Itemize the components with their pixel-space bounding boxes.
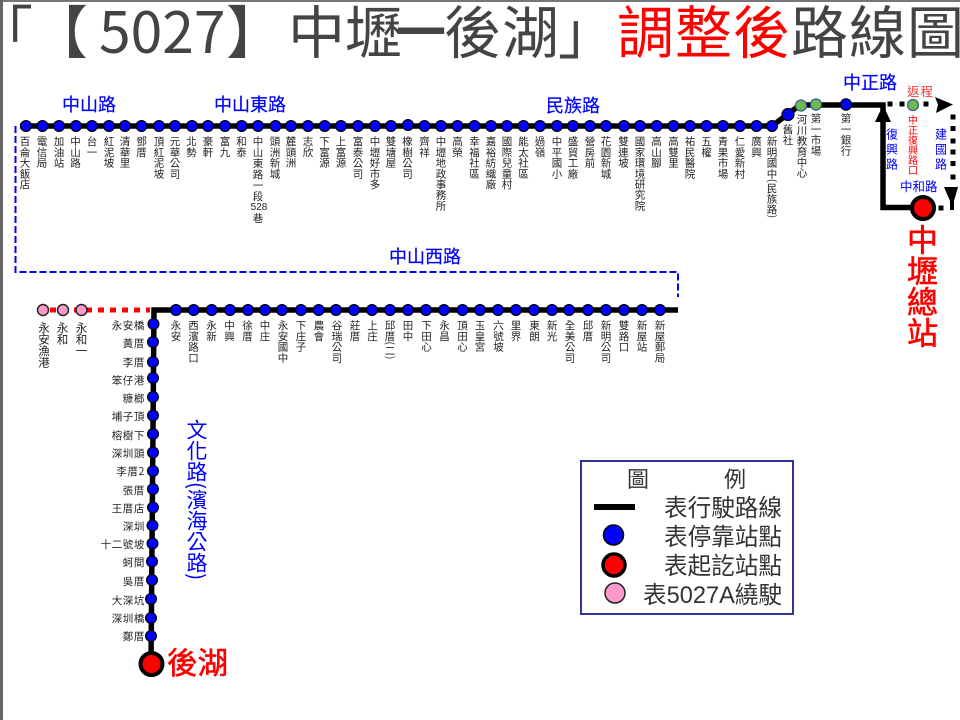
top row station labels: 鄧厝 bbox=[134, 136, 149, 158]
bottom row station labels: 西濱路口 bbox=[186, 320, 201, 363]
top row station labels: 舊社 bbox=[780, 123, 796, 146]
legend: route line: 表行駛路線 bbox=[664, 495, 782, 522]
bottom row station labels: 永安國中 bbox=[276, 319, 290, 363]
bottom row station labels: 上庄 bbox=[365, 320, 380, 342]
top row station labels: 頂紅泥坡 bbox=[152, 136, 166, 179]
bottom row station labels: 谷瑞公司 bbox=[330, 320, 344, 363]
left column station labels: 鄭厝 bbox=[123, 629, 145, 644]
label: 返程: 返程 bbox=[907, 81, 934, 100]
bottom row station labels bbox=[168, 319, 668, 363]
top row station labels: 國際兒童村 bbox=[500, 136, 514, 190]
bottom row station labels: 永昌 bbox=[437, 319, 452, 342]
top row station labels: 雙連坡 bbox=[616, 135, 631, 169]
left column station labels: 李厝 bbox=[123, 355, 145, 370]
top row station labels: 頭洲新城 bbox=[268, 136, 282, 179]
legend: terminal bbox=[603, 553, 782, 580]
top row station labels: 台一 bbox=[84, 135, 100, 157]
5027A detour stations bbox=[38, 304, 87, 316]
top row station labels: 麓頭洲 bbox=[284, 135, 298, 168]
top row station labels: 能太社區 bbox=[516, 135, 531, 179]
top row station labels: 加油站 bbox=[52, 136, 66, 169]
bottom row station labels: 永安 bbox=[168, 319, 184, 342]
arrow: outbound up bbox=[875, 105, 891, 122]
top row station labels: 盛貿工廠 bbox=[566, 135, 580, 179]
legend: stop: 表停靠站點 bbox=[664, 524, 782, 551]
top row station labels: 528 bbox=[251, 202, 268, 213]
top row station labels: 高榮 bbox=[450, 135, 465, 158]
road name: 中和路: 中和路 bbox=[900, 176, 938, 195]
road name: 中山東路: 中山東路 bbox=[214, 91, 286, 117]
5027A detour labels: 永和 bbox=[54, 321, 70, 346]
left column station labels: 李厝2 bbox=[116, 464, 145, 479]
left column station labels: 笨仔港 bbox=[112, 373, 145, 388]
bottom row station labels: 里界 bbox=[508, 320, 524, 342]
bottom row station labels: 新明公司 bbox=[598, 319, 614, 363]
top row station labels: 富泰公司 bbox=[350, 135, 366, 179]
bottom row station labels: 新屋郵局 bbox=[652, 319, 668, 363]
top row station labels: 齊祥 bbox=[417, 135, 432, 158]
left column station labels: 吳厝 bbox=[123, 574, 145, 589]
top row station labels: 和泰 bbox=[234, 136, 249, 157]
top row station labels: 中壢地政事務所 bbox=[434, 135, 448, 211]
top row station labels: 祐民醫院 bbox=[682, 135, 698, 179]
road name: 復興路: 復興路 bbox=[884, 128, 900, 173]
top row station labels: 新明國中(民族路) bbox=[764, 135, 780, 218]
bottom row station labels: 邱厝(二) bbox=[382, 319, 398, 360]
5027A detour labels: 永和一 bbox=[74, 321, 90, 356]
top row station labels: 豪軒 bbox=[200, 135, 216, 158]
bottom route line bbox=[151, 310, 678, 665]
left column station labels: 永安橋 bbox=[112, 318, 145, 333]
bottom row station labels: 邱厝 bbox=[580, 319, 596, 342]
legend title: 例 bbox=[724, 467, 746, 492]
legend: terminal: 表起訖站點 bbox=[664, 553, 782, 580]
left column station labels: 蚵間 bbox=[123, 555, 145, 570]
left column station labels: 十二號坡 bbox=[101, 537, 145, 552]
bottom row station labels: 東朗 bbox=[527, 319, 542, 342]
bottom row station labels: 下田心 bbox=[419, 320, 434, 352]
bottom row station labels: 全美公司 bbox=[562, 320, 578, 363]
top row station labels: 中山東路一段 bbox=[250, 135, 266, 202]
top row station labels: 電信局 bbox=[34, 136, 50, 169]
top row station labels: 中山路 bbox=[68, 135, 83, 169]
top row station labels: 過嶺 bbox=[532, 135, 548, 158]
top row station labels: 富九 bbox=[218, 135, 232, 157]
road name: 中山西路: 中山西路 bbox=[389, 243, 461, 269]
title bbox=[0, 0, 960, 70]
top row station labels: 下富源 bbox=[317, 136, 332, 169]
bottom row station labels: 新屋站 bbox=[634, 319, 650, 353]
bottom row station labels: 田中 bbox=[400, 320, 416, 342]
top row station labels: 元華公司 bbox=[168, 136, 182, 179]
bottom row station labels: 莊厝 bbox=[348, 319, 362, 342]
left column station labels: 糠榔 bbox=[123, 391, 145, 406]
bottom row station labels: 永新 bbox=[204, 319, 219, 342]
top row station labels: 青果市場 bbox=[716, 135, 730, 179]
top row station labels: 百侖大飯店 bbox=[18, 136, 32, 190]
left column station labels: 王厝店 bbox=[112, 501, 145, 516]
top row station labels: 幸福社區 bbox=[467, 136, 482, 179]
top row station labels: 巷 bbox=[250, 213, 266, 224]
top row station labels: 高雙里 bbox=[666, 135, 681, 168]
legend: 5027A detour: 表5027A繞駛 bbox=[643, 582, 782, 609]
top row station labels: 志欣 bbox=[300, 135, 316, 158]
top row station labels: 中平國小 bbox=[550, 135, 564, 179]
left column station labels: 黃厝 bbox=[123, 336, 145, 351]
bottom row station labels: 中興 bbox=[222, 319, 237, 342]
top row station labels: 雙塘屋 bbox=[384, 135, 398, 169]
top row station labels: 五權 bbox=[699, 136, 714, 158]
bottom row station labels: 玉皇宮 bbox=[472, 320, 488, 353]
5027A detour: red dotted bbox=[50, 308, 150, 312]
5027A detour labels: 永安漁港 bbox=[36, 321, 52, 368]
bottom row station labels: 雙路口 bbox=[616, 319, 632, 352]
bottom row station labels: 中庄 bbox=[258, 319, 272, 342]
terminal label: 中壢總站: 中壢總站 bbox=[900, 224, 945, 348]
5027A detour labels bbox=[36, 321, 90, 368]
top row stations bbox=[21, 99, 852, 131]
top row station labels: 北勢 bbox=[184, 136, 199, 158]
legend title bbox=[627, 467, 746, 492]
legend bbox=[581, 461, 793, 614]
left column station labels: 埔子頂 bbox=[112, 409, 145, 424]
top row station labels: 國家環境研究院 bbox=[632, 136, 648, 211]
top row station labels: 第一銀行 bbox=[838, 112, 854, 156]
left column station labels: 張厝 bbox=[123, 483, 145, 498]
top row station labels: 花園新城 bbox=[598, 135, 614, 179]
top row station labels: 第一市場 bbox=[808, 112, 824, 156]
left column station labels: 深圳 bbox=[123, 519, 145, 534]
bottom row station labels: 六號坡 bbox=[491, 320, 506, 353]
legend title: 圖 bbox=[627, 467, 649, 492]
dashed connector: 中山西路 bbox=[16, 126, 678, 297]
road name: 建國路: 建國路 bbox=[932, 128, 950, 173]
legend: stop bbox=[604, 524, 782, 551]
legend: route line bbox=[594, 495, 782, 522]
top row station labels: 上富源 bbox=[334, 136, 348, 169]
terminal label: 後湖: 後湖 bbox=[167, 639, 228, 683]
left column station labels bbox=[101, 318, 145, 644]
left column station labels: 榕樹下 bbox=[112, 428, 145, 443]
top row station labels: 仁愛新村 bbox=[732, 136, 748, 179]
top row station labels: 嘉裕紡織廠 bbox=[484, 135, 498, 190]
road name: 文化路(濱海公路): 文化路(濱海公路) bbox=[182, 419, 212, 580]
return route: dotted bbox=[888, 97, 958, 210]
top row station labels: 高山腳 bbox=[649, 135, 664, 169]
bottom row station labels: 農會 bbox=[312, 319, 326, 341]
bottom row stations bbox=[171, 305, 665, 315]
main route line: top bbox=[20, 105, 922, 208]
top row station labels bbox=[18, 112, 854, 224]
road name: 民族路: 民族路 bbox=[546, 92, 600, 118]
terminal: 後湖 marker bbox=[140, 653, 162, 675]
left column station labels: 深圳橋 bbox=[112, 611, 145, 626]
terminal: 中壢總站 marker bbox=[912, 197, 934, 219]
bottom row station labels: 下庄子 bbox=[294, 320, 308, 352]
left column station labels: 大深坑 bbox=[112, 593, 145, 608]
road name: 中正路: 中正路 bbox=[843, 69, 897, 95]
top row station labels: 橡樹公司 bbox=[400, 135, 415, 179]
top row station labels: 清華里 bbox=[118, 135, 132, 168]
bottom row station labels: 徐厝 bbox=[240, 319, 255, 342]
top row station labels: 中壢好市多 bbox=[368, 135, 382, 190]
top row station labels: 營房前 bbox=[582, 135, 598, 169]
bottom row station labels: 新光 bbox=[544, 319, 560, 342]
road name: 中山路: 中山路 bbox=[62, 91, 116, 117]
left column stations bbox=[146, 319, 159, 641]
bottom row station labels: 頂田心 bbox=[455, 320, 470, 352]
label: 中正復興路口: 中正復興路口 bbox=[906, 114, 920, 175]
left column station labels: 深圳頭 bbox=[112, 446, 145, 461]
top row station labels: 紅泥坡 bbox=[102, 136, 116, 169]
top row station labels: 廣興 bbox=[749, 135, 764, 158]
transfer stations (green) bbox=[796, 99, 918, 111]
top row station labels: 河川教育中心 bbox=[794, 114, 810, 178]
